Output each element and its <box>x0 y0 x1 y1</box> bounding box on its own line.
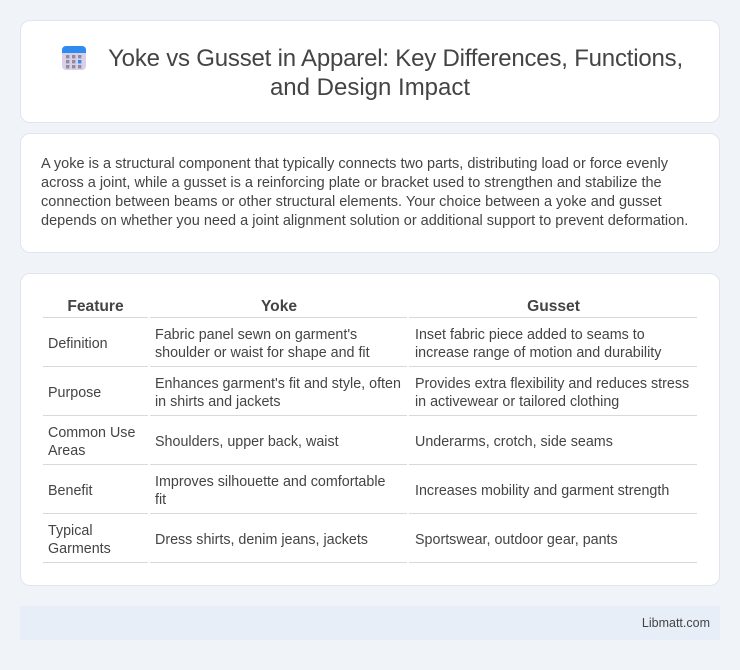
row: benefit: Benefit <box>48 483 93 499</box>
row: common use areas: Underarms, crotch, side seams <box>415 434 613 450</box>
row: purpose: in shirts and jackets <box>155 394 281 410</box>
row: definition <box>48 327 662 361</box>
row: typical garments: Typical <box>48 523 92 539</box>
intro paragraph: across a joint, while a gusset is a reinforcing plate or bracket used to strengthen and stabilize the <box>41 175 662 191</box>
row: common use areas: Common Use <box>48 425 135 441</box>
intro paragraph: connection between beams or other structural elements. Your choice between a yoke and gusset <box>41 194 662 210</box>
table header <box>67 298 580 315</box>
row: definition: shoulder or waist for shape and fit <box>155 345 370 361</box>
row: purpose: Enhances garment's fit and style, often <box>155 376 401 392</box>
row: purpose <box>48 376 689 410</box>
row: benefit: fit <box>155 492 166 508</box>
row: common use areas <box>48 425 613 459</box>
table header: Feature <box>67 298 124 315</box>
row: purpose: Provides extra flexibility and reduces stress <box>415 376 689 392</box>
panel: comparison table <box>20 273 720 586</box>
intro paragraph <box>41 156 688 229</box>
row: definition: Fabric panel sewn on garment's <box>155 327 357 343</box>
table header: Yoke <box>261 298 297 315</box>
row: benefit: Increases mobility and garment strength <box>415 483 669 499</box>
row: typical garments: Garments <box>48 541 111 557</box>
row: purpose: in activewear or tailored clothing <box>415 394 619 410</box>
row: typical garments: Dress shirts, denim jeans, jackets <box>155 532 368 548</box>
panel: intro text <box>20 133 720 253</box>
row: common use areas: Areas <box>48 443 85 459</box>
intro paragraph: A yoke is a structural component that typically connects two parts, distributing load or force evenly <box>41 156 668 172</box>
title: and Design Impact <box>270 74 470 101</box>
row: benefit <box>48 474 669 508</box>
row: definition: Definition <box>48 336 108 352</box>
row: definition: Inset fabric piece added to seams to <box>415 327 645 343</box>
row: common use areas: Shoulders, upper back, waist <box>155 434 339 450</box>
row: benefit: Improves silhouette and comfortable <box>155 474 385 490</box>
intro paragraph: depends on whether you need a joint alignment solution or additional support to prevent deformation. <box>41 213 688 229</box>
title: Yoke vs Gusset in Apparel: Key Differences, Functions, <box>108 45 683 72</box>
title <box>108 45 683 101</box>
footer bar <box>20 606 720 640</box>
icon: calendar <box>62 46 86 70</box>
row: typical garments <box>48 523 618 557</box>
row: definition: increase range of motion and durability <box>415 345 661 361</box>
footer credit: Libmatt.com <box>642 616 710 630</box>
row: typical garments: Sportswear, outdoor gear, pants <box>415 532 618 548</box>
row: purpose: Purpose <box>48 385 101 401</box>
panel: title card <box>20 20 720 123</box>
table header: Gusset <box>527 298 580 315</box>
